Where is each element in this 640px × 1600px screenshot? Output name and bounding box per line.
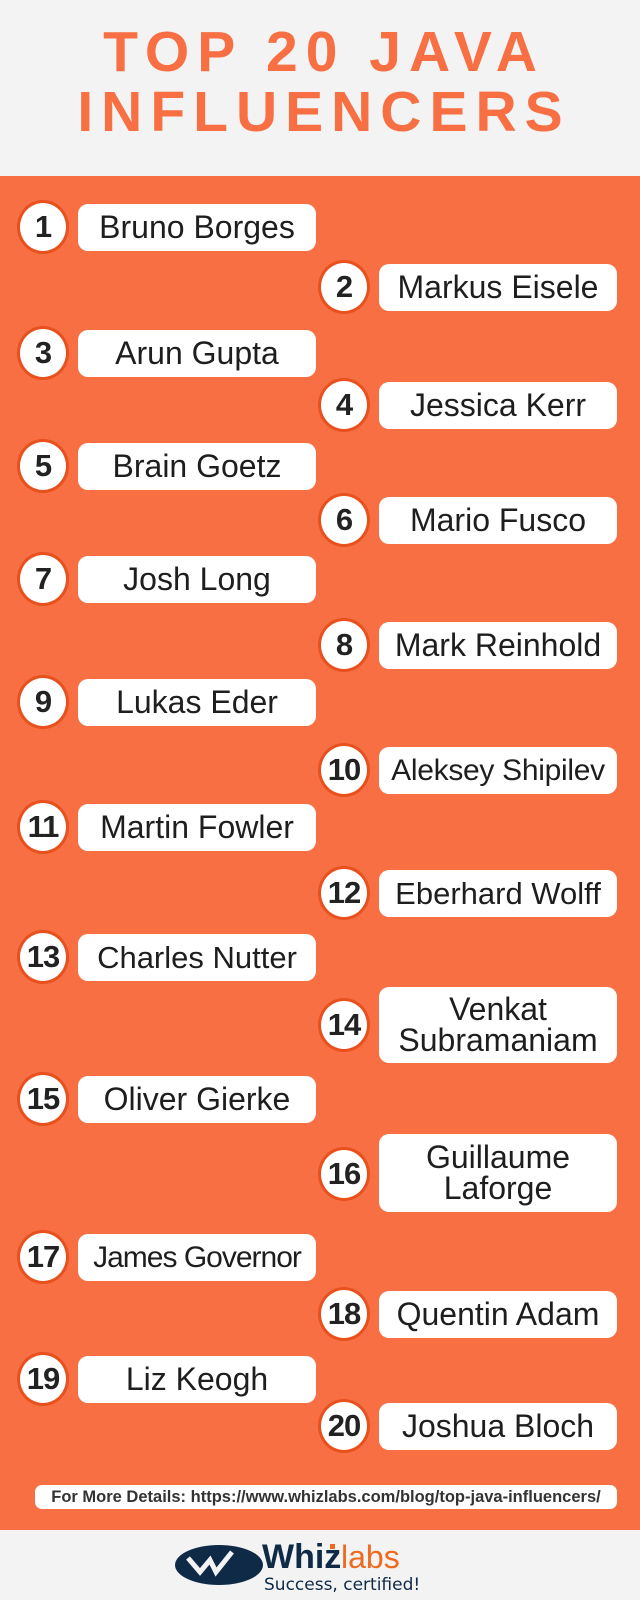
item 2 bbox=[318, 260, 617, 314]
item 10 bbox=[318, 743, 617, 797]
item 18 bbox=[318, 1287, 617, 1341]
item 11 bbox=[17, 800, 316, 854]
item 10: Aleksey Shipilev bbox=[391, 754, 605, 787]
item 3 bbox=[17, 326, 316, 380]
item 1: 1 bbox=[35, 209, 51, 244]
item 14: 14 bbox=[328, 1007, 360, 1042]
item 6 bbox=[318, 493, 617, 547]
item 6: Mario Fusco bbox=[410, 502, 586, 538]
item 18: Quentin Adam bbox=[397, 1296, 599, 1332]
item 16: Laforge bbox=[444, 1170, 552, 1206]
item 14: Subramaniam bbox=[398, 1022, 598, 1058]
item 17: James Governor bbox=[93, 1241, 301, 1274]
logo text: Whiz bbox=[262, 1538, 341, 1576]
item 16 bbox=[318, 1134, 617, 1212]
item 12: Eberhard Wolff bbox=[395, 876, 601, 911]
title bbox=[77, 20, 571, 144]
item 10: 10 bbox=[328, 752, 360, 787]
item 12 bbox=[318, 866, 617, 920]
item 8 bbox=[318, 618, 617, 672]
item 16: 16 bbox=[328, 1156, 360, 1191]
logo text: labs bbox=[341, 1539, 400, 1575]
item 16: Guillaume bbox=[426, 1139, 570, 1175]
item 6: 6 bbox=[336, 502, 352, 537]
item 9: Lukas Eder bbox=[116, 684, 278, 720]
title: INFLUENCERS bbox=[77, 80, 571, 144]
item 9: 9 bbox=[35, 684, 51, 719]
item 12: 12 bbox=[328, 875, 360, 910]
title: TOP 20 JAVA bbox=[103, 20, 545, 84]
item 1 bbox=[17, 200, 316, 254]
item 17: 17 bbox=[27, 1239, 59, 1274]
item 19: 19 bbox=[27, 1361, 59, 1396]
item 19: Liz Keogh bbox=[126, 1361, 268, 1397]
item 5 bbox=[17, 439, 316, 493]
item 7 bbox=[17, 552, 316, 606]
logo: whizlabs bbox=[175, 1538, 420, 1594]
item 19 bbox=[17, 1352, 316, 1406]
item 14: Venkat bbox=[449, 991, 547, 1027]
item 15: Oliver Gierke bbox=[104, 1081, 290, 1117]
logo text bbox=[262, 1538, 420, 1595]
item 7: 7 bbox=[35, 561, 51, 596]
item 13 bbox=[17, 930, 316, 984]
item 2: 2 bbox=[336, 269, 352, 304]
item 3: 3 bbox=[35, 335, 51, 370]
item 13: Charles Nutter bbox=[97, 940, 297, 975]
item 8: Mark Reinhold bbox=[395, 627, 601, 663]
item 18: 18 bbox=[328, 1296, 360, 1331]
item 4 bbox=[318, 378, 617, 432]
item 13: 13 bbox=[27, 939, 59, 974]
item 20 bbox=[318, 1399, 617, 1453]
icon: logo ellipse bbox=[175, 1545, 263, 1585]
item 15: 15 bbox=[27, 1081, 59, 1116]
item 20: Joshua Bloch bbox=[402, 1408, 594, 1444]
item 5: Brain Goetz bbox=[113, 448, 281, 484]
item 11: Martin Fowler bbox=[100, 809, 294, 845]
item 20: 20 bbox=[328, 1408, 360, 1443]
item 17 bbox=[17, 1230, 316, 1284]
item 15 bbox=[17, 1072, 316, 1126]
item 5: 5 bbox=[35, 448, 51, 483]
item 11: 11 bbox=[28, 809, 58, 844]
item 3: Arun Gupta bbox=[115, 335, 279, 371]
item 4: Jessica Kerr bbox=[410, 387, 586, 423]
item 2: Markus Eisele bbox=[398, 269, 598, 305]
item 1: Bruno Borges bbox=[99, 209, 295, 245]
item 9 bbox=[17, 675, 316, 729]
footer link: For More Details: https://www.whizlabs.com/blog/top-java-influencers/ bbox=[51, 1488, 601, 1506]
item 14 bbox=[318, 987, 617, 1063]
item 7: Josh Long bbox=[123, 561, 271, 597]
item 8: 8 bbox=[336, 627, 352, 662]
item 4: 4 bbox=[336, 387, 352, 422]
